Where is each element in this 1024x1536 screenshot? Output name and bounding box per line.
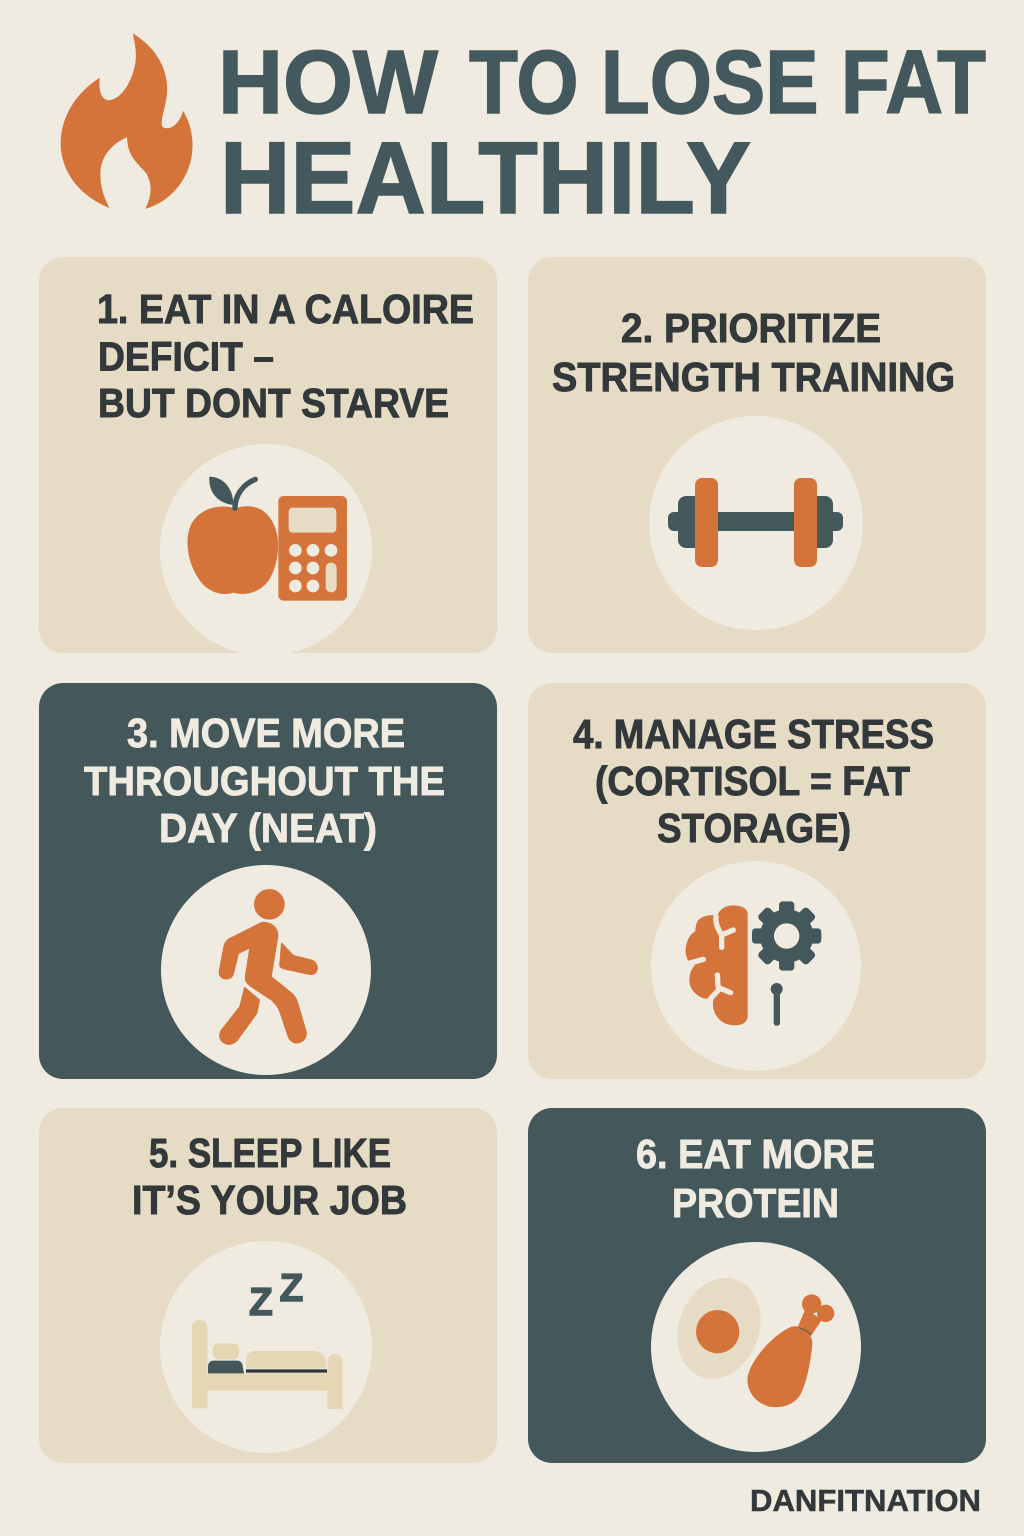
heading: step 6: PROTEIN — [672, 1180, 839, 1226]
icon: dumbbell — [649, 416, 863, 630]
heading: step 3: DAY (NEAT) — [159, 805, 377, 851]
heading: step 2: 2. PRIORITIZE — [621, 305, 881, 351]
heading: step 6: 6. EAT MORE — [636, 1131, 875, 1177]
panel: sleep — [39, 1108, 497, 1463]
heading: step 4: 4. MANAGE STRESS — [573, 711, 934, 757]
heading: step 6 — [636, 1131, 875, 1226]
heading: step 1: DEFICIT – — [98, 334, 274, 380]
heading: step 5: IT’S YOUR JOB — [132, 1177, 407, 1223]
icon: bed with zzz: Z — [249, 1281, 273, 1324]
heading: step 5: 5. SLEEP LIKE — [149, 1130, 391, 1176]
heading: step 4: STORAGE) — [657, 805, 851, 851]
title: HOW — [218, 33, 438, 133]
heading: step 3 — [84, 710, 445, 851]
icon: flame — [61, 34, 192, 208]
footer credit: DANFITNATION — [750, 1483, 981, 1518]
title — [218, 33, 986, 235]
heading: step 2 — [552, 305, 955, 400]
icon: brain and gear — [651, 861, 861, 1071]
heading: step 4: (CORTISOL = FAT — [595, 758, 910, 804]
panel: move more throughout the day — [39, 683, 497, 1079]
heading: step 1: 1. EAT IN A CALOIRE — [97, 286, 474, 332]
panel: eat in a calorie deficit — [39, 257, 497, 656]
icon: bed with zzz — [160, 1241, 372, 1453]
heading: step 3: 3. MOVE MORE — [127, 710, 405, 756]
heading: step 5 — [132, 1130, 407, 1223]
panel: eat more protein — [528, 1108, 986, 1463]
heading: step 1: BUT DONT STARVE — [98, 380, 449, 426]
icon: apple and calculator — [160, 444, 372, 656]
icon: walking person — [161, 865, 371, 1075]
heading: step 3: THROUGHOUT THE — [84, 758, 445, 804]
heading: step 2: STRENGTH TRAINING — [552, 354, 955, 400]
heading: step 4 — [573, 711, 934, 851]
panel: prioritize strength training — [528, 257, 986, 653]
heading: step 1 — [97, 286, 474, 426]
icon: bed with zzz: Z — [280, 1267, 303, 1310]
title: HEALTHILY — [220, 121, 751, 235]
icon: egg and chicken drumstick — [651, 1242, 861, 1452]
panel: manage stress — [528, 683, 986, 1079]
